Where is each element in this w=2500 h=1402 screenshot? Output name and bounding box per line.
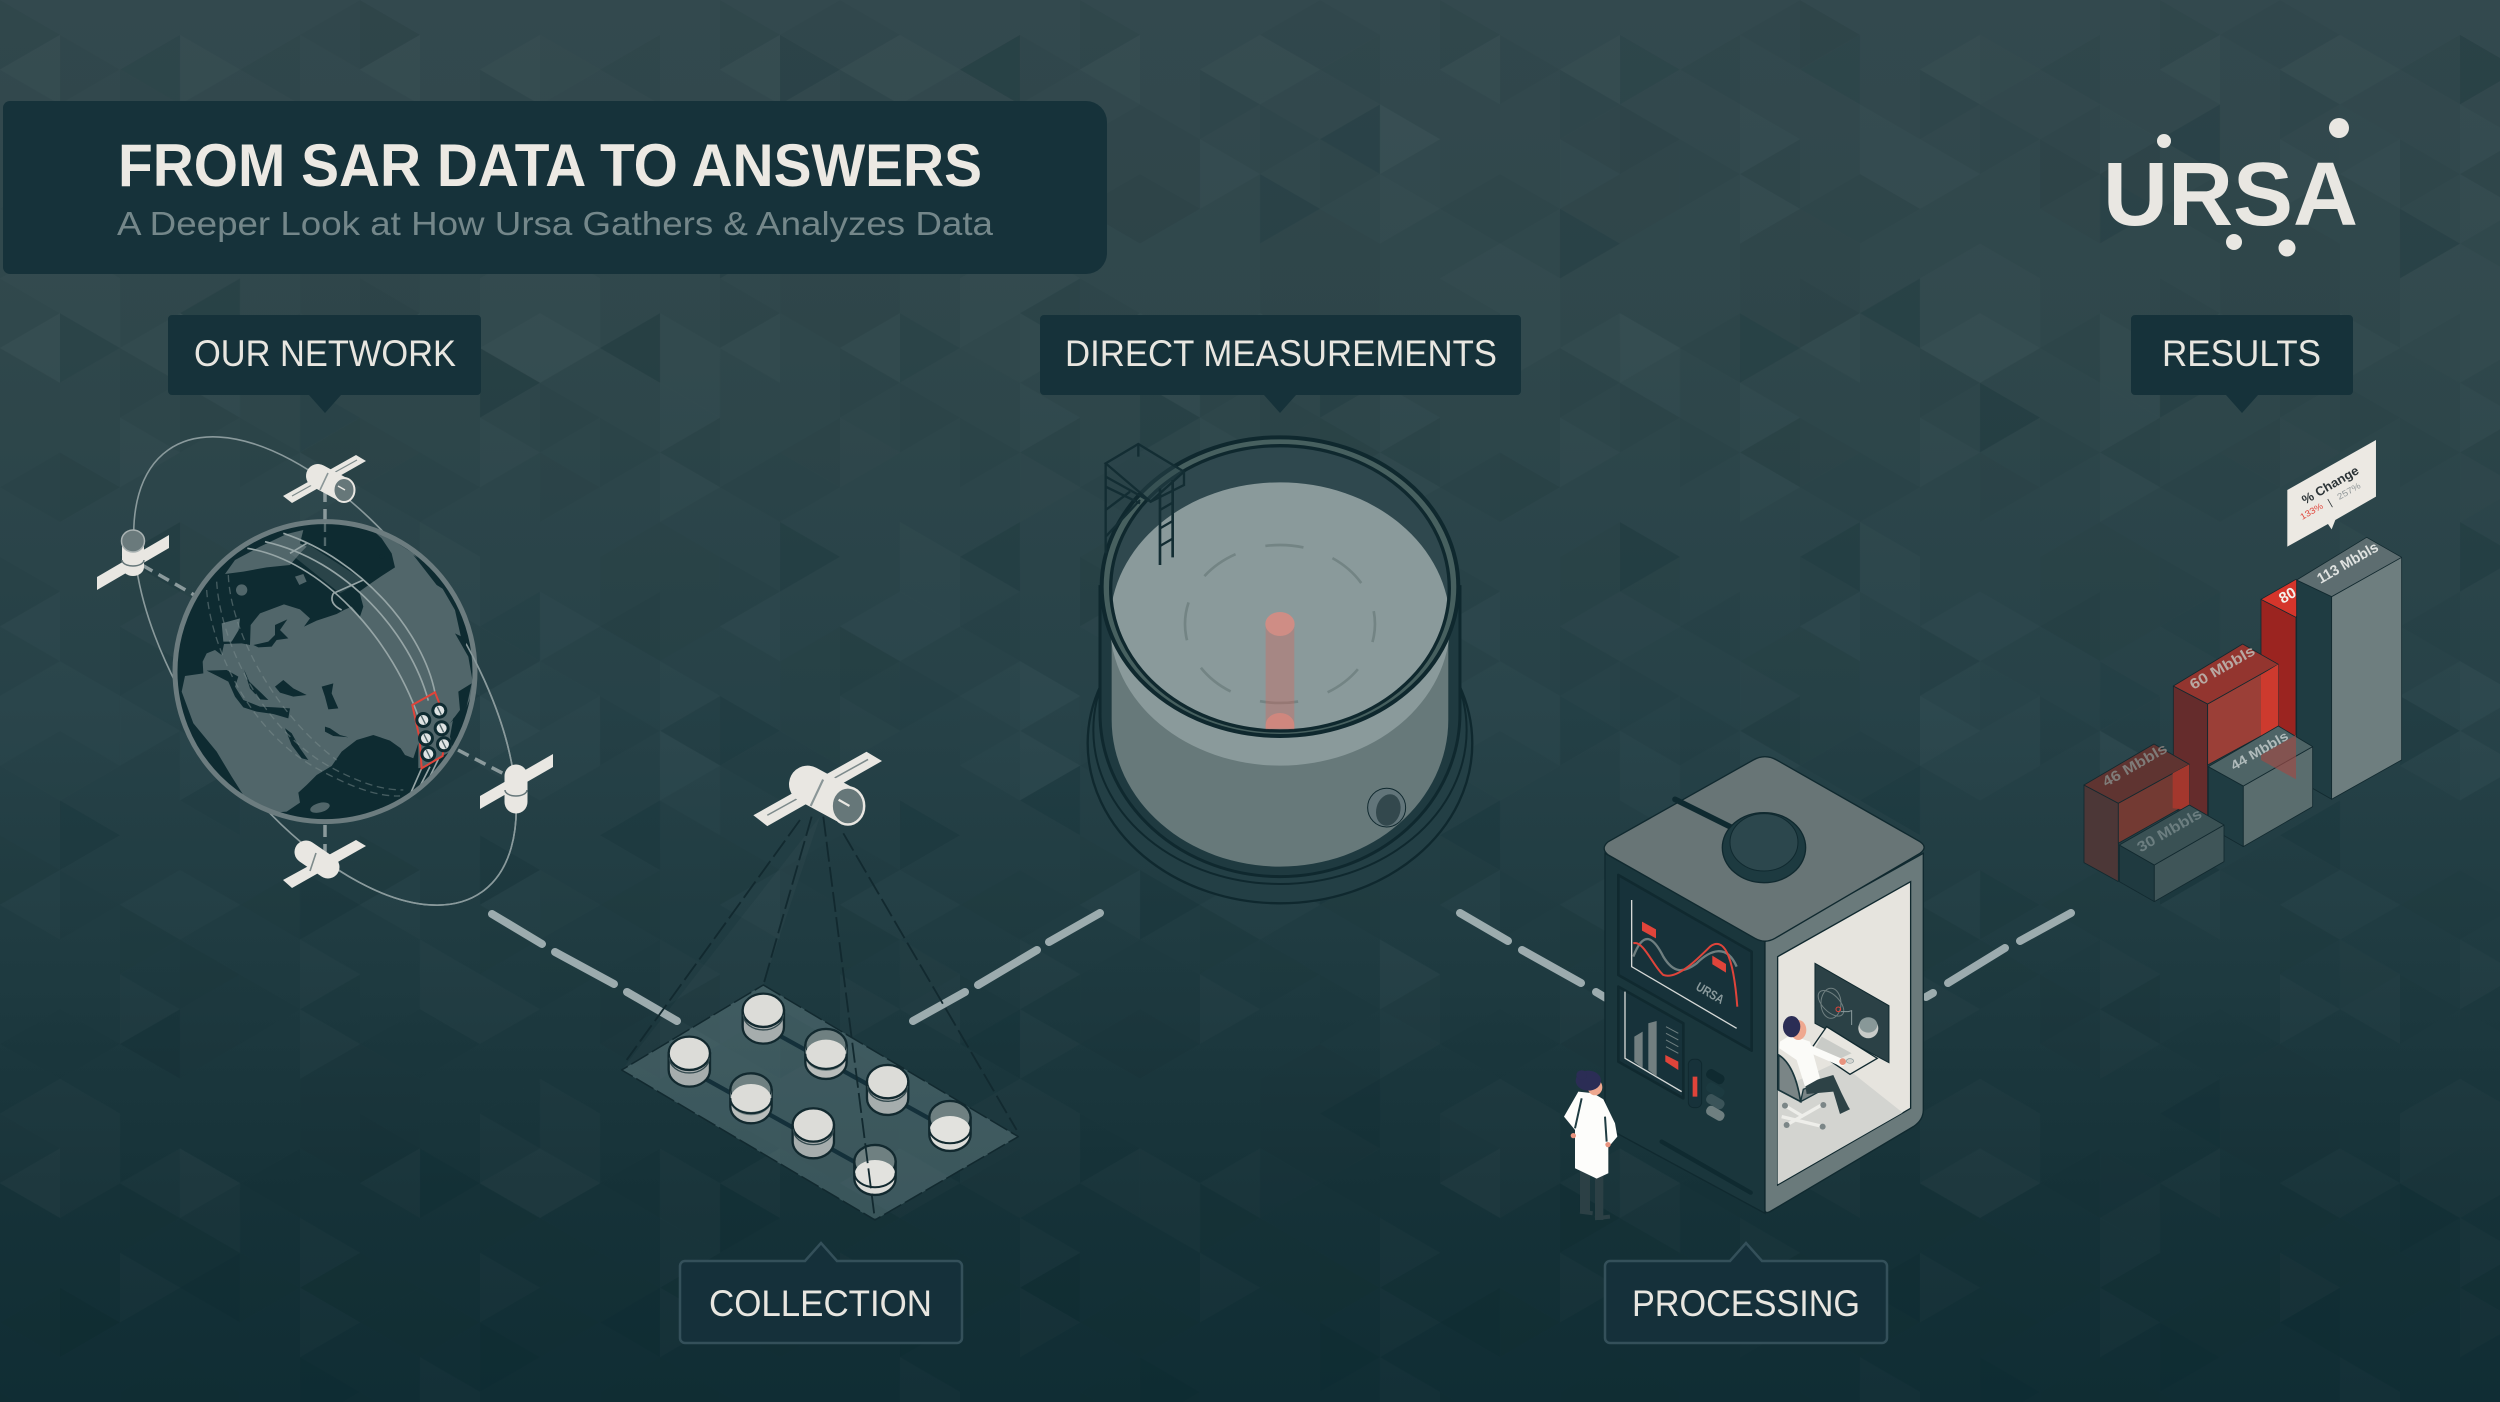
bar 60 [2173, 643, 2278, 825]
title: FROM SAR DATA TO ANSWERS [118, 132, 982, 199]
bar 44 [2208, 726, 2313, 847]
rim ring [1102, 437, 1458, 736]
subtitle: A Deeper Look at How Ursa Gathers & Analyzes Data [117, 205, 994, 242]
bar 60: 60 Mbbls [2187, 643, 2258, 693]
hatch [1368, 788, 1406, 829]
gauge ring [1185, 545, 1375, 703]
orbit tracks [296, 544, 362, 594]
platform and ladder [1106, 444, 1184, 565]
area of interest [412, 692, 443, 768]
logo: URSA: URSA [2103, 145, 2358, 245]
machine left face [1605, 853, 1765, 1213]
seas [207, 554, 475, 760]
liquid surface [1110, 482, 1450, 766]
land: eurasia and africa [182, 531, 477, 813]
wall screen [1814, 963, 1889, 1063]
network: globe and satellites [97, 436, 553, 906]
satellite: collection [753, 752, 882, 826]
bar 44: 44 Mbbls [2228, 728, 2291, 773]
desk with keyboard [1812, 1027, 1877, 1074]
label: results [2131, 315, 2353, 413]
label: direct measurements: DIRECT MEASUREMENTS [1065, 333, 1497, 374]
controls [1662, 1059, 1751, 1193]
label: our network [168, 315, 481, 413]
monitor: line chart: URSA [1693, 980, 1726, 1007]
machine top [1604, 757, 1924, 941]
storage tanks [669, 994, 971, 1195]
bar 46 [2084, 741, 2189, 882]
orbit path [59, 372, 591, 970]
room window [1778, 882, 1911, 1185]
land: arctic coast [225, 530, 307, 574]
satellite: bottom [283, 840, 366, 888]
gauge column [1265, 612, 1295, 729]
label: processing [1605, 1243, 1887, 1343]
bar 80: 80 Mbbls [2276, 560, 2341, 607]
tank base [1088, 583, 1472, 903]
label: collection [680, 1243, 962, 1343]
scientist [1564, 1070, 1617, 1220]
callout: percent change: % Change [2299, 463, 2361, 507]
chair [1779, 1055, 1827, 1130]
collection: satellite imaging tanks [622, 817, 1018, 1220]
panel: title banner [3, 101, 1107, 274]
satellite: left [97, 530, 169, 590]
callout: percent change: 257% [2335, 480, 2363, 502]
globe [175, 522, 477, 822]
satellite: top [283, 455, 366, 503]
technician [1779, 1016, 1850, 1114]
beam [622, 817, 1018, 1220]
label: processing: PROCESSING [1632, 1283, 1860, 1324]
tank interior [1102, 437, 1458, 736]
processing: analysis machine [1564, 757, 1924, 1220]
callout: percent change: 133% [2298, 501, 2325, 522]
direct measurements: storage tank [1088, 437, 1472, 903]
bar 30 [2119, 805, 2224, 902]
orbit front arc [338, 643, 517, 906]
bar 113 [2297, 537, 2402, 799]
label: direct measurements [1040, 315, 1521, 413]
bar 46: 46 Mbbls [2100, 741, 2170, 791]
monitored tanks [415, 703, 452, 762]
tank wall [1100, 587, 1460, 877]
pipes [689, 1027, 950, 1173]
callout: percent change [2287, 440, 2376, 547]
arrow: dashed connectors [492, 913, 2071, 1021]
tank body [1112, 620, 1448, 867]
label: our network: OUR NETWORK [194, 333, 456, 374]
beam dashes [627, 817, 1017, 1220]
monitor: bar chart [1618, 987, 1683, 1098]
satellite links [142, 490, 506, 860]
callout: percent change: | [2326, 498, 2334, 509]
bar 113: 113 Mbbls [2315, 540, 2382, 587]
slot and lens [1675, 799, 1806, 883]
label: results: RESULTS [2162, 333, 2321, 374]
satellite: right [480, 754, 553, 809]
bar 30: 30 Mbbls [2135, 806, 2205, 856]
ground plate [622, 985, 1018, 1220]
bar 80 [2260, 579, 2296, 736]
label: collection: COLLECTION [709, 1283, 932, 1324]
monitor: line chart [1618, 875, 1752, 1051]
machine right face [1765, 853, 1923, 1212]
results: isometric bar chart [2084, 440, 2402, 902]
